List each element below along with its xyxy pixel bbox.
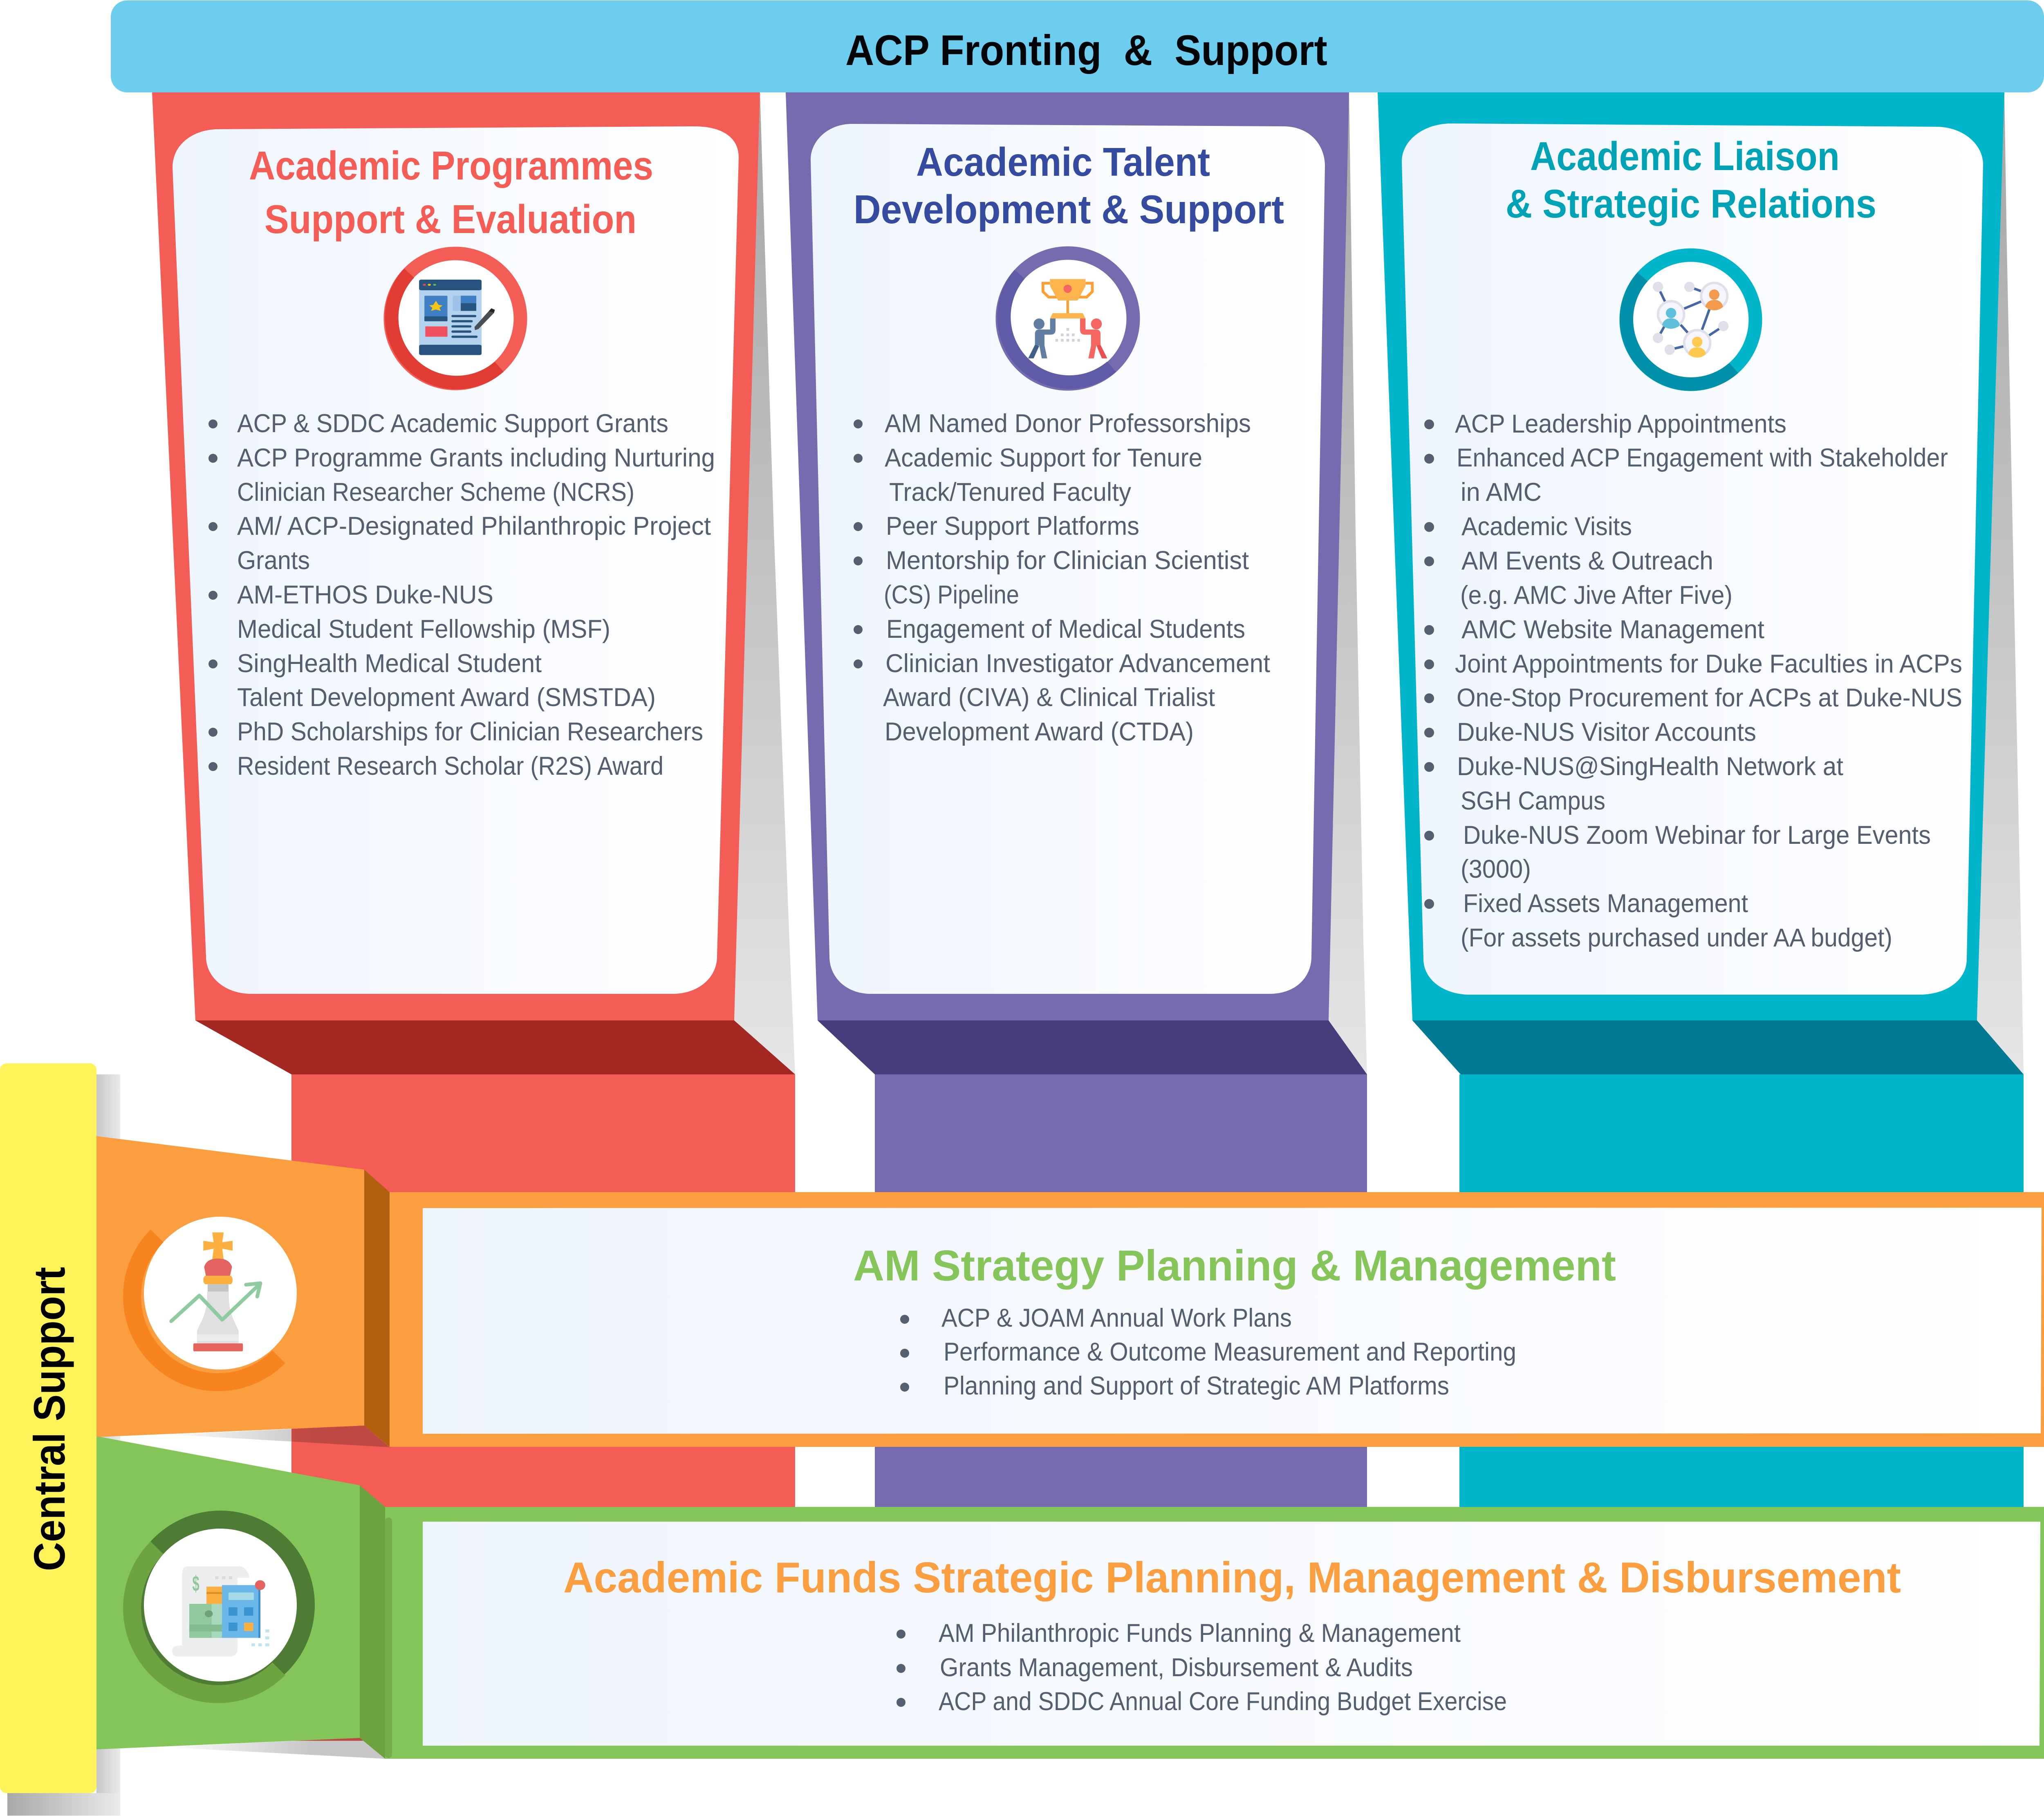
list: liaison: Duke-NUS@SingHealth Network at	[1457, 752, 1843, 781]
list: programmes	[208, 409, 715, 780]
side bar: central support	[0, 1063, 96, 1793]
list: liaison: AM Events & Outreach	[1461, 547, 1713, 575]
list: liaison: (For assets purchased under AA budget)	[1461, 924, 1892, 952]
heading: academic talent: Academic Talent	[916, 139, 1210, 184]
list: programmes: AM-ETHOS Duke-NUS	[237, 581, 493, 609]
list: liaison: SGH Campus	[1461, 787, 1605, 815]
list: strategy: Planning and Support of Strategic AM Platforms	[944, 1372, 1449, 1400]
list: liaison: AMC Website Management	[1461, 615, 1764, 644]
list: talent: Development Award (CTDA)	[885, 717, 1194, 746]
panel: academic liaison and strategic relations	[1378, 92, 2024, 1507]
side bar: central support: Central Support	[25, 1267, 74, 1571]
list: funds: ACP and SDDC Annual Core Funding Budget Exercise	[939, 1687, 1507, 1716]
icon: chess piece with growth arrow	[132, 1217, 297, 1382]
list: programmes: PhD Scholarships for Clinician Researchers	[237, 717, 703, 746]
list: liaison: Fixed Assets Management	[1463, 889, 1748, 918]
list: strategy: Performance & Outcome Measurement and Reporting	[944, 1338, 1516, 1366]
list: programmes: ACP & SDDC Academic Support Grants	[237, 409, 668, 438]
heading: academic funds: Academic Funds Strategic Planning, Management & Disbursement	[563, 1554, 1901, 1602]
panel: AM strategy planning and management	[96, 1136, 2044, 1447]
list: programmes: Talent Development Award (SMSTDA)	[237, 683, 656, 712]
list: programmes: Resident Research Scholar (R2S) Award	[237, 752, 663, 780]
list: programmes: SingHealth Medical Student	[237, 649, 542, 678]
icon: people network	[1626, 255, 1755, 384]
list: liaison: Duke-NUS Visitor Accounts	[1457, 718, 1756, 747]
central support shadow	[7, 1074, 120, 1816]
list: talent: Academic Support for Tenure	[885, 444, 1202, 472]
list: liaison: (e.g. AMC Jive After Five)	[1460, 581, 1732, 610]
icon: two people lifting a trophy	[1002, 253, 1133, 384]
list: programmes: Clinician Researcher Scheme (NCRS)	[237, 478, 634, 507]
panel: academic talent development and support	[786, 92, 1367, 1507]
list: liaison: Academic Visits	[1461, 512, 1632, 541]
heading: academic programmes	[249, 143, 653, 242]
heading: AM strategy: AM Strategy Planning & Management	[853, 1242, 1616, 1290]
list: talent: (CS) Pipeline	[884, 581, 1019, 609]
list: funds: Grants Management, Disbursement & Audits	[940, 1653, 1413, 1682]
top bar: ACP fronting and support: ACP Fronting & Support	[845, 27, 1327, 74]
panel: academic funds strategic planning	[96, 1436, 2044, 1759]
heading: academic liaison: & Strategic Relations	[1506, 181, 1876, 226]
top bar: ACP fronting and support	[111, 0, 2044, 92]
list: programmes: AM/ ACP-Designated Philanthropic Project	[237, 512, 711, 540]
heading: academic liaison	[1506, 134, 1876, 226]
list: talent: AM Named Donor Professorships	[885, 409, 1251, 438]
heading: academic liaison: Academic Liaison	[1530, 134, 1840, 179]
heading: academic programmes: Academic Programmes	[249, 143, 653, 188]
list: programmes: Grants	[237, 546, 310, 575]
icon: budget document, money and calculator	[132, 1520, 306, 1694]
list: liaison: One-Stop Procurement for ACPs at Duke-NUS	[1457, 684, 1962, 712]
heading: academic talent: Development & Support	[854, 187, 1284, 232]
list: liaison: ACP Leadership Appointments	[1455, 410, 1786, 438]
list: funds: AM Philanthropic Funds Planning & Management	[939, 1619, 1461, 1648]
list: liaison: Joint Appointments for Duke Faculties in ACPs	[1455, 650, 1962, 678]
list: strategy	[900, 1304, 1516, 1400]
list: talent: Clinician Investigator Advancement	[885, 649, 1270, 678]
list: liaison: (3000)	[1461, 855, 1531, 883]
list: talent: Award (CIVA) & Clinical Trialist	[883, 683, 1215, 712]
list: talent: Mentorship for Clinician Scientist	[886, 546, 1249, 575]
list: talent	[854, 409, 1270, 746]
list: liaison: Duke-NUS Zoom Webinar for Large Events	[1463, 821, 1931, 850]
icon: budget document, money and calculator: $	[193, 1572, 199, 1596]
list: talent: Track/Tenured Faculty	[889, 478, 1131, 507]
icon: web document with pen	[390, 253, 520, 383]
heading: academic talent	[854, 139, 1284, 232]
list: liaison: Enhanced ACP Engagement with Stakeholder	[1457, 444, 1948, 472]
list: talent: Peer Support Platforms	[886, 512, 1139, 540]
list: programmes: ACP Programme Grants including Nurturing	[237, 444, 715, 472]
heading: academic programmes: Support & Evaluation	[264, 197, 637, 242]
list: strategy: ACP & JOAM Annual Work Plans	[941, 1304, 1292, 1332]
list: liaison: in AMC	[1461, 478, 1542, 507]
list: funds	[896, 1619, 1507, 1716]
panel: academic programmes support and evaluation	[152, 92, 795, 1741]
list: programmes: Medical Student Fellowship (MSF)	[237, 615, 610, 643]
list: talent: Engagement of Medical Students	[886, 615, 1245, 643]
list: liaison	[1424, 410, 1962, 952]
